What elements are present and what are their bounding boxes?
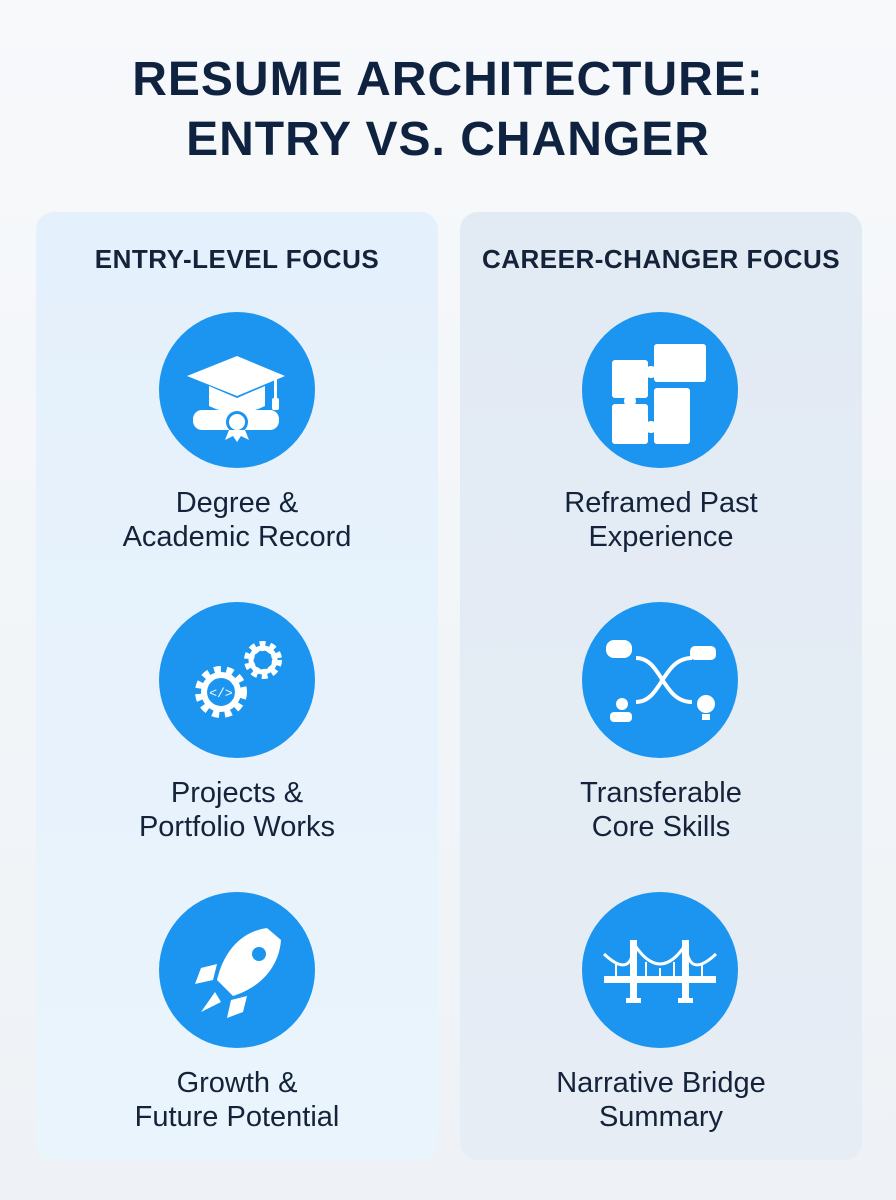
title: ENTRY VS. CHANGER: [186, 113, 710, 166]
title: RESUME ARCHITECTURE:: [132, 53, 764, 106]
label: growth: Growth &: [177, 1067, 297, 1099]
icon: bridge: [582, 892, 738, 1048]
icon: graduation cap: [159, 312, 315, 468]
label: transferable: Core Skills: [592, 811, 730, 843]
label: transferable: Transferable: [580, 777, 742, 809]
title: [132, 53, 764, 166]
label: narrative: Narrative Bridge: [556, 1067, 766, 1099]
label: growth: [135, 1067, 339, 1133]
icon: rocket: [159, 892, 315, 1048]
label: projects: Portfolio Works: [139, 811, 335, 843]
icon: gears: </>: [209, 686, 233, 701]
label: transferable: [580, 777, 742, 843]
icon: puzzle: [582, 312, 738, 468]
label: projects: [139, 777, 335, 843]
label: narrative: [556, 1067, 766, 1133]
icon: transferable skills: [582, 602, 738, 758]
icon: gears: [159, 602, 315, 758]
panel: entry-level: [36, 212, 438, 1160]
label: reframed: Reframed Past: [564, 487, 758, 519]
label: projects: Projects &: [171, 777, 303, 809]
label: degree: [122, 487, 351, 553]
label: degree: Degree &: [176, 487, 298, 519]
panel: career-changer: [460, 212, 862, 1160]
label: growth: Future Potential: [135, 1101, 339, 1133]
label: narrative: Summary: [599, 1101, 723, 1133]
label: reframed: [564, 487, 758, 553]
label: degree: Academic Record: [123, 521, 351, 553]
heading: entry-level: ENTRY-LEVEL FOCUS: [95, 244, 379, 274]
label: reframed: Experience: [588, 521, 734, 553]
heading: career-changer: CAREER-CHANGER FOCUS: [482, 244, 840, 274]
